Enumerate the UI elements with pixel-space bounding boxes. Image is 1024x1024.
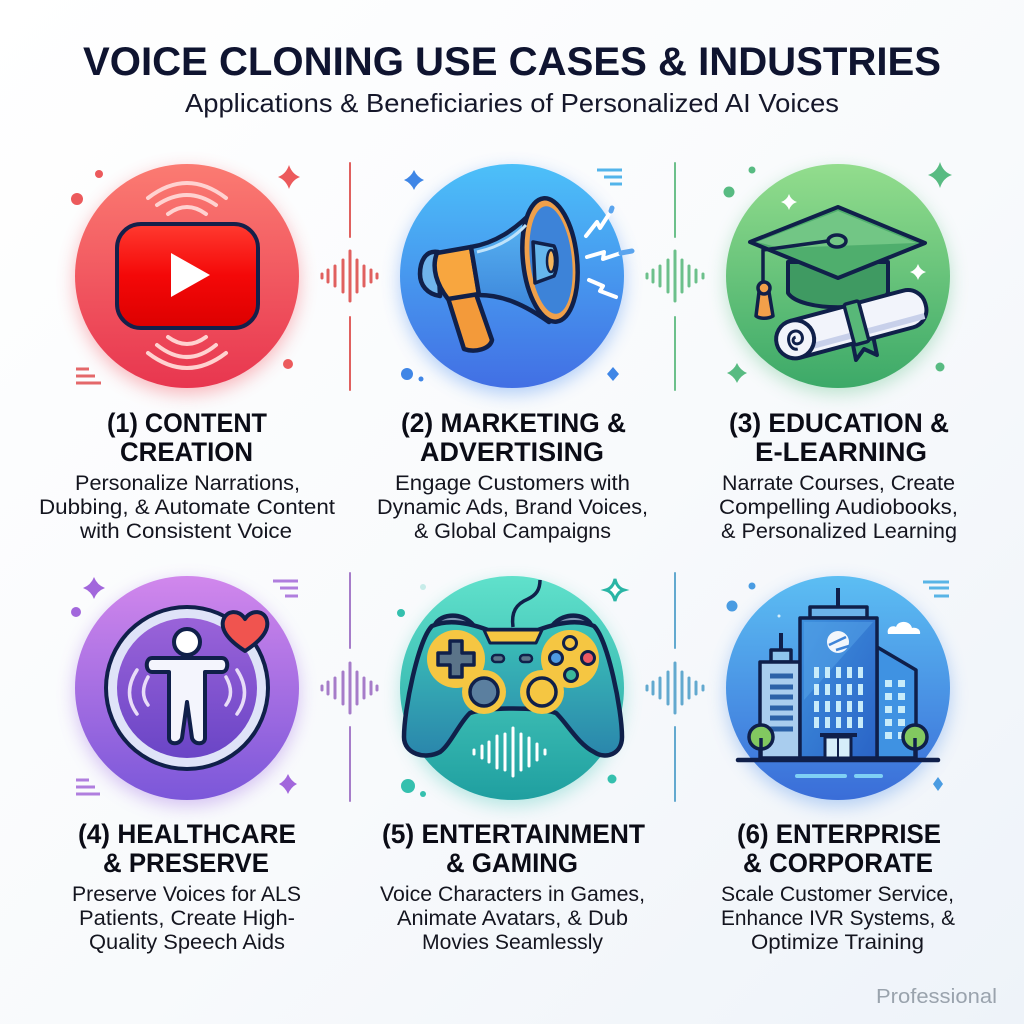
description: healthcare and preserve: Quality Speech Aids: [89, 931, 285, 954]
heading: education and e-learning: (3) EDUCATION &: [729, 408, 949, 438]
description: marketing and advertising: Dynamic Ads, Brand Voices,: [377, 496, 648, 519]
panel: enterprise and corporate: [721, 576, 955, 954]
subtitle: Applications & Beneficiaries of Personalized AI Voices: [185, 88, 839, 118]
description: entertainment and gaming: Movies Seamlessly: [422, 931, 603, 954]
divider with waveform: red: [322, 163, 377, 390]
description: education and e-learning: Compelling Audiobooks,: [719, 496, 958, 519]
icon: graduation cap and diploma: [724, 162, 952, 394]
heading: marketing and advertising: (2) MARKETING &: [401, 408, 626, 438]
icon: office buildings: [726, 576, 950, 806]
description: content creation: Personalize Narrations,: [75, 472, 300, 495]
icon: person with heart: [71, 576, 299, 806]
icon: game controller: [397, 576, 624, 806]
title: VOICE CLONING USE CASES & INDUSTRIES: [83, 40, 941, 84]
divider with waveform: blue: [647, 573, 703, 801]
description: education and e-learning: & Personalized Learning: [721, 520, 957, 543]
footer label: Professional: [876, 986, 997, 1008]
panel: healthcare and preserve: [71, 576, 301, 954]
description: enterprise and corporate: Scale Customer Service,: [721, 883, 954, 906]
divider with waveform: purple: [322, 573, 377, 801]
description: marketing and advertising: & Global Campaigns: [414, 520, 611, 543]
heading: healthcare and preserve: (4) HEALTHCARE: [78, 819, 296, 849]
description: education and e-learning: Narrate Courses, Create: [722, 472, 955, 495]
icon: megaphone: [400, 164, 632, 394]
heading: enterprise and corporate: (6) ENTERPRISE: [737, 819, 941, 849]
heading: healthcare and preserve: & PRESERVE: [103, 848, 269, 878]
heading: entertainment and gaming: (5) ENTERTAINMENT: [382, 819, 645, 849]
heading: entertainment and gaming: & GAMING: [446, 848, 578, 878]
description: entertainment and gaming: Voice Characters in Games,: [380, 883, 645, 906]
panel: education and e-learning: [719, 162, 958, 543]
heading: content creation: CREATION: [120, 437, 253, 467]
description: content creation: Dubbing, & Automate Content: [39, 496, 335, 519]
panel: marketing and advertising: [377, 164, 648, 543]
panel: entertainment and gaming: [380, 576, 645, 954]
divider with waveform: green: [647, 163, 703, 390]
description: enterprise and corporate: Optimize Training: [751, 931, 924, 954]
description: marketing and advertising: Engage Customers with: [395, 472, 630, 495]
panel: content creation: [39, 164, 335, 543]
heading: marketing and advertising: ADVERTISING: [420, 437, 604, 467]
description: enterprise and corporate: Enhance IVR Systems, &: [721, 907, 955, 930]
heading: enterprise and corporate: & CORPORATE: [743, 848, 933, 878]
description: entertainment and gaming: Animate Avatars, & Dub: [397, 907, 628, 930]
icon: video play badge: [71, 164, 300, 394]
heading: education and e-learning: E-LEARNING: [755, 437, 927, 467]
description: healthcare and preserve: Preserve Voices for ALS: [72, 883, 301, 906]
description: content creation: with Consistent Voice: [79, 520, 292, 543]
heading: content creation: (1) CONTENT: [107, 408, 267, 438]
description: healthcare and preserve: Patients, Create High-: [79, 907, 295, 930]
